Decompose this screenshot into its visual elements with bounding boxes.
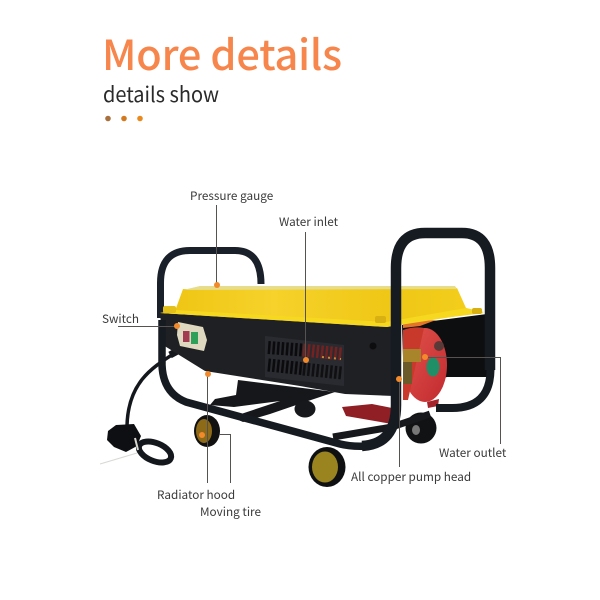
- rear handle: [160, 250, 261, 318]
- label: pressure gauge: Pressure gauge: [190, 187, 274, 204]
- power cord and plug: [100, 349, 181, 467]
- label: switch: [102, 310, 180, 329]
- label: radiator hood: [157, 371, 235, 503]
- cabinet bolt: [370, 342, 376, 350]
- rear wheel: [294, 400, 316, 418]
- red base plate: [342, 404, 392, 424]
- label: all copper pump head: All copper pump head: [351, 468, 471, 485]
- radiator grille: [265, 336, 344, 386]
- subtitle: details show: [103, 79, 219, 109]
- right rear wheel: [406, 412, 436, 444]
- front hoop: [362, 233, 490, 446]
- label: moving tire: Moving tire: [200, 503, 261, 520]
- label: water outlet: [422, 354, 507, 461]
- rear hoop return: [436, 360, 490, 408]
- label: all copper pump head: [351, 376, 471, 485]
- label: moving tire: [199, 432, 261, 520]
- label: switch: Switch: [102, 310, 139, 327]
- yellow hood: [160, 286, 484, 327]
- front wheel: [308, 447, 346, 487]
- left and bottom frame: [162, 320, 368, 446]
- label: water inlet: [279, 213, 339, 363]
- lower chassis platform: [210, 380, 335, 422]
- switch panel: [177, 322, 207, 351]
- rear panel: [402, 314, 487, 390]
- label: pressure gauge: [190, 187, 274, 288]
- title: More details: [102, 22, 342, 82]
- pump head: [403, 320, 447, 408]
- lower chassis rail: [333, 414, 430, 437]
- black cabinet: [160, 313, 394, 396]
- label: water outlet: Water outlet: [439, 444, 507, 461]
- label: water inlet: Water inlet: [279, 213, 339, 230]
- decorative three dots: [105, 116, 143, 121]
- left wheel: [194, 415, 220, 447]
- pressure washer product illustration: [100, 233, 490, 487]
- label: radiator hood: Radiator hood: [157, 486, 235, 503]
